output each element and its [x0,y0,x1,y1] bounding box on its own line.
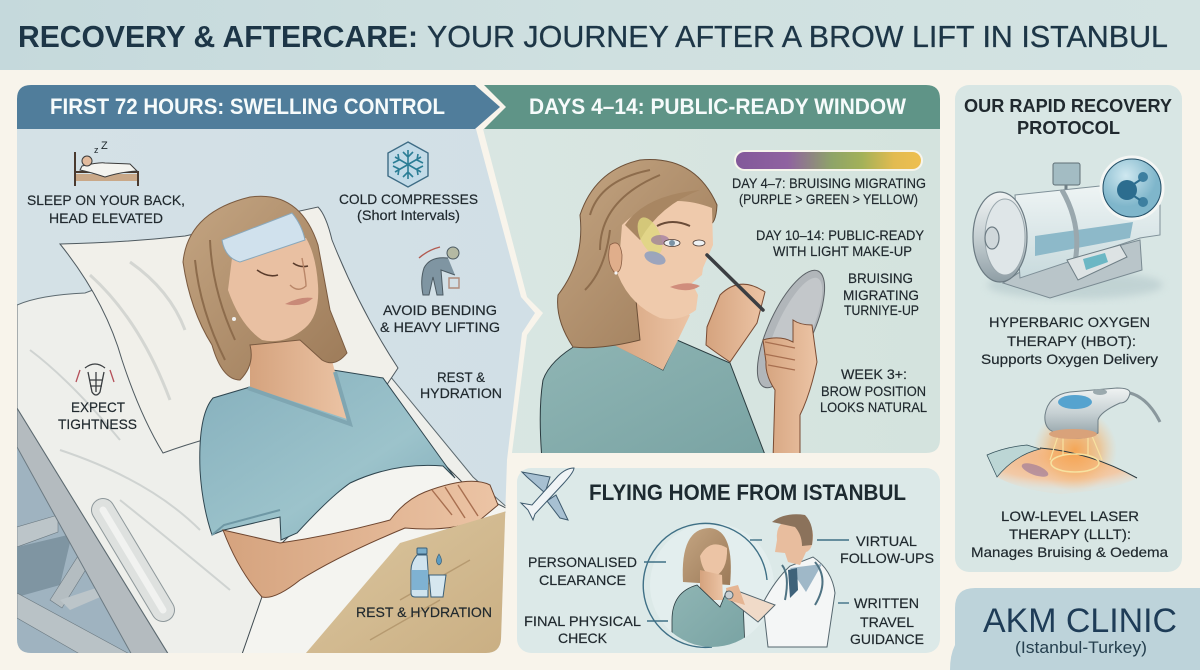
text: hyperbaric oxygen therapy [981,314,1158,367]
shirt [540,340,767,460]
text: low-level laser therapy: THERAPY (LLLT): [1009,526,1131,542]
text: hyperbaric oxygen therapy: HYPERBARIC OXYGEN [989,314,1150,330]
panel header [17,85,500,129]
facial bruising [638,217,662,254]
text: bruising migrating [843,270,919,318]
text: low-level laser therapy: LOW-LEVEL LASER [1001,508,1139,524]
text: hyperbaric oxygen therapy: THERAPY (HBOT): [1007,333,1136,349]
text: low-level laser therapy: Manages Bruising & Oedema [971,544,1168,560]
text: cold compresses [339,191,478,223]
callout: personalised clearance: CLEARANCE [539,572,626,588]
panel: clinic name [950,588,1200,670]
callout: written travel guidance: GUIDANCE [850,631,924,647]
text: rest and hydration: REST & [437,369,486,385]
text: bruising migrating: MIGRATING [843,287,919,303]
callout: personalised clearance: PERSONALISED [528,554,637,570]
heading: protocol: PROTOCOL [1017,118,1120,138]
callout: written travel guidance: WRITTEN [854,595,919,611]
text: expect tightness: TIGHTNESS [58,416,137,432]
text: rest and hydration lower: REST & HYDRATION [356,604,492,620]
make-up brush [707,255,763,310]
panel: days 4-14 [483,85,940,460]
neck [615,302,690,370]
text: week 3+: LOOKS NATURAL [820,399,927,415]
illustration: woman applying make-up [540,160,838,460]
ear [609,243,622,272]
text: cold compresses: COLD COMPRESSES [339,191,478,207]
pillow [60,207,398,453]
text: week 3+: BROW POSITION [821,383,926,399]
title banner [0,0,1200,70]
lap blanket [240,464,510,660]
text: expect tightness: EXPECT [71,399,125,415]
illustration: hyperbaric oxygen chamber [973,157,1163,299]
text: cold compresses: (Short Intervals) [357,207,460,223]
face [228,238,318,341]
text: day 4-7 [732,175,926,207]
text: day 4-7: (PURPLE > GREEN > YELLOW) [739,191,918,207]
icon: muscle tightness [76,364,114,395]
chamber body [1015,186,1160,278]
icon: airplane [521,468,574,520]
chart: bruising colour gradient bar [735,151,922,170]
text: sleep on your back: HEAD ELEVATED [49,210,163,226]
text: bruising migrating: TURNIYE-UP [844,302,919,318]
icon: avoid bending [419,247,459,295]
heading: protocol: OUR RAPID RECOVERY [964,96,1172,116]
text: day 4-7: DAY 4–7: BRUISING MIGRATING [732,175,926,191]
callout: final physical check [524,613,668,646]
panel: rapid recovery protocol [955,85,1182,572]
text: sleep on your back [27,192,185,226]
text: bruising migrating: BRUISING [848,270,913,286]
panel: flying home [517,468,940,653]
panel header: FIRST 72 HOURS: SWELLING CONTROL [50,94,445,119]
cold compress on forehead [222,213,305,262]
icon: person sleeping in bed: z [94,145,99,155]
mirror [756,270,826,388]
panel: first 72 hours [17,85,535,660]
arm and folded hands [223,481,498,597]
text: expect tightness [58,399,137,432]
text: rest and hydration: HYDRATION [420,385,502,401]
text: day 10-14 [756,227,925,259]
text: low-level laser therapy [971,508,1168,560]
bed rail [103,510,163,610]
callout: virtual follow-ups: VIRTUAL [856,533,917,549]
icon: person sleeping in bed: Z [101,140,108,152]
text: week 3+: WEEK 3+: [841,366,907,382]
illustration: low-level laser device [987,388,1160,494]
brush hand and arm [706,284,765,362]
panel header [484,85,940,129]
text: day 10-14: WITH LIGHT MAKE-UP [773,243,912,259]
callout: final physical check: CHECK [558,630,608,646]
chamber base [1003,240,1142,298]
panel: clinic name: AKM CLINIC [983,602,1177,640]
text: day 10-14: DAY 10–14: PUBLIC-READY [756,227,925,243]
shirt [200,370,455,540]
tan blanket [306,512,506,653]
callout: virtual follow-ups: FOLLOW-UPS [840,550,934,566]
icon: person sleeping in bed [75,140,138,186]
panel: clinic name: (Istanbul-Turkey) [1015,638,1147,657]
illustration: doctor examining patient [643,514,835,650]
chamber door [973,192,1027,282]
callout: written travel guidance: TRAVEL [860,614,914,630]
face [618,201,713,319]
callout: written travel guidance [838,595,924,647]
text: avoid bending: & HEAVY LIFTING [380,319,500,335]
callout: personalised clearance [528,554,666,588]
text: week 3+ [820,366,927,415]
panel header: DAYS 4–14: PUBLIC-READY WINDOW [529,94,906,119]
neck [250,340,346,419]
text: hyperbaric oxygen therapy: Supports Oxygen Delivery [981,351,1158,367]
illustration: woman resting in hospital bed [17,196,510,660]
hair [558,160,717,348]
text: avoid bending: AVOID BENDING [383,302,497,318]
text: rest and hydration [420,369,502,401]
mirror hand and arm [763,320,817,460]
monitor [1053,163,1080,185]
heading: flying home: FLYING HOME FROM ISTANBUL [589,480,906,505]
text: avoid bending [380,302,500,335]
oxygen bubble [1101,157,1163,219]
title banner: YOUR JOURNEY AFTER A BROW LIFT IN ISTANBUL [427,19,1168,54]
icon: snowflake hexagon [388,142,428,187]
title banner: RECOVERY & AFTERCARE: [18,19,418,54]
hair [183,196,347,380]
text: sleep on your back: SLEEP ON YOUR BACK, [27,192,185,208]
callout: final physical check: FINAL PHYSICAL [524,613,641,629]
icon: water bottle and glass [411,548,446,597]
control panel [1067,245,1127,280]
callout: virtual follow-ups [817,533,934,566]
heading: protocol [964,96,1172,138]
